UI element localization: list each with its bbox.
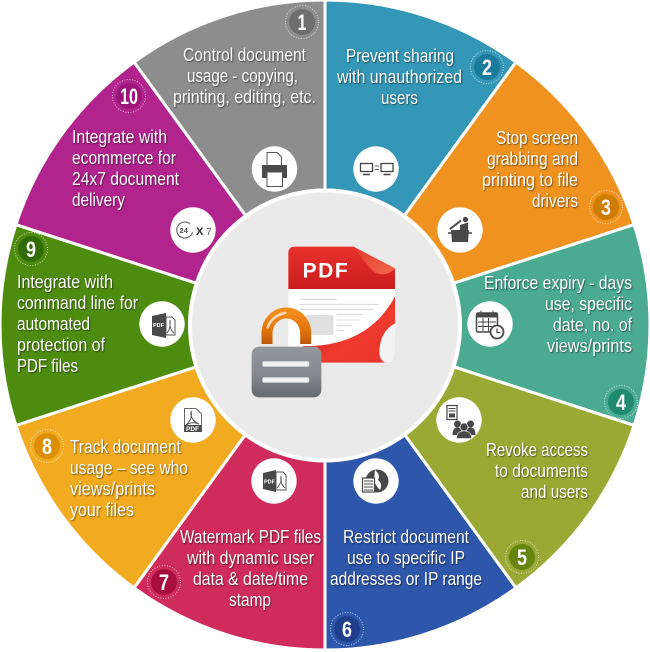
badge: number 5: 5 bbox=[517, 545, 527, 570]
text: enforce expiry: date, no. of bbox=[553, 315, 633, 335]
panel: 3 stop screen grabbing bbox=[404, 62, 634, 283]
text: restrict document use: Restrict document bbox=[343, 527, 469, 547]
heading: PDF label: PDF bbox=[303, 259, 348, 282]
text: stop screen grabbing: printing to file bbox=[482, 170, 578, 190]
badge: number 10 bbox=[112, 80, 146, 112]
text: control document usage: printing, editing, etc. bbox=[173, 87, 316, 107]
text: stop screen grabbing bbox=[482, 128, 578, 211]
text: track document usage: your files bbox=[70, 500, 134, 520]
badge: number 8: 8 bbox=[42, 434, 52, 459]
text: watermark PDF files bbox=[180, 527, 321, 610]
panel: 4 enforce expiry bbox=[453, 225, 650, 425]
badge: number 2: 2 bbox=[482, 55, 492, 80]
text: prevent sharing: users bbox=[381, 88, 418, 108]
text: integrate with ecommerce: ecommerce for bbox=[72, 148, 176, 168]
badge: number 5 bbox=[506, 540, 538, 574]
text: integrate with command line: Integrate with bbox=[17, 272, 113, 292]
text: prevent sharing: Prevent sharing bbox=[346, 46, 454, 66]
icon: 24x7 bbox=[170, 207, 216, 253]
badge: number 6 bbox=[330, 612, 364, 646]
text: enforce expiry: Enforce expiry - days bbox=[484, 273, 632, 293]
text: stop screen grabbing: Stop screen bbox=[496, 128, 578, 148]
text: enforce expiry bbox=[484, 273, 633, 356]
badge: number 6: 6 bbox=[342, 617, 352, 642]
badge: number 3 bbox=[590, 190, 622, 224]
text: enforce expiry: use, specific bbox=[545, 294, 632, 314]
text: prevent sharing: with unauthorized bbox=[336, 67, 462, 87]
text: track document usage: views/prints bbox=[70, 479, 155, 499]
badge: number 2 bbox=[470, 50, 504, 84]
icon: 24x7: 24 bbox=[180, 226, 189, 235]
panel: 5 revoke access bbox=[404, 367, 634, 588]
badge: number 1: 1 bbox=[298, 10, 306, 35]
icon: PDF watermark pages bbox=[251, 458, 297, 504]
text: track document usage: usage – see who bbox=[70, 458, 188, 478]
badge: number 8 bbox=[30, 430, 64, 462]
text: revoke access: to documents bbox=[495, 461, 588, 481]
panel: 6 restrict document use bbox=[325, 434, 516, 650]
text: stop screen grabbing: drivers bbox=[532, 191, 578, 211]
text: integrate with ecommerce bbox=[72, 127, 179, 210]
text: restrict document use: addresses or IP range bbox=[330, 569, 482, 589]
text: integrate with ecommerce: Integrate with bbox=[72, 127, 167, 147]
icon: 24x7: X bbox=[196, 226, 204, 238]
icon: calendar and clock bbox=[467, 301, 513, 347]
badge: number 10: 10 bbox=[120, 84, 138, 109]
text: enforce expiry: views/prints bbox=[547, 336, 632, 356]
badge: number 3: 3 bbox=[601, 195, 611, 220]
text: watermark PDF files: with dynamic user bbox=[186, 548, 314, 568]
badge: number 7 bbox=[148, 566, 180, 598]
icon: PDF pages: PDF bbox=[153, 323, 165, 329]
text: track document usage bbox=[70, 437, 188, 520]
icon: PDF file bbox=[170, 397, 216, 443]
text: integrate with ecommerce: 24x7 document bbox=[72, 169, 179, 189]
text: integrate with command line: protection of bbox=[17, 335, 106, 355]
text: watermark PDF files: data & date/time bbox=[193, 569, 308, 589]
text: watermark PDF files: stamp bbox=[229, 590, 271, 610]
center disc with PDF lock bbox=[188, 188, 462, 462]
text: stop screen grabbing: grabbing and bbox=[487, 149, 578, 169]
text: integrate with command line: automated bbox=[17, 314, 90, 334]
text: restrict document use: use to specific IP bbox=[347, 548, 465, 568]
text: control document usage bbox=[173, 45, 316, 107]
text: integrate with command line bbox=[17, 272, 138, 376]
text: track document usage: Track document bbox=[70, 437, 181, 457]
text: control document usage: usage - copying, bbox=[187, 66, 298, 86]
icon: screen grab box bbox=[437, 207, 483, 253]
text: revoke access: and users bbox=[521, 482, 588, 502]
text: restrict document use bbox=[330, 527, 482, 589]
badge: number 4: 4 bbox=[616, 390, 627, 415]
panel: 7 watermark PDF files bbox=[134, 434, 325, 650]
text: watermark PDF files: Watermark PDF files bbox=[180, 527, 321, 547]
icon: printer bbox=[252, 146, 297, 192]
text: integrate with command line: PDF files bbox=[17, 356, 78, 376]
icon: PDF watermark pages: PDF bbox=[264, 480, 276, 486]
panel: 8 track document usage bbox=[16, 367, 246, 588]
icon: 24x7: 7 bbox=[206, 227, 212, 238]
text: integrate with command line: command line for bbox=[17, 293, 138, 313]
panel: 1 control document usage bbox=[134, 0, 325, 216]
icon: PDF document bbox=[288, 247, 395, 363]
badge: number 1 bbox=[286, 6, 318, 38]
badge: number 7: 7 bbox=[159, 570, 169, 595]
badge: number 9: 9 bbox=[26, 237, 36, 262]
icon: two linked monitors bbox=[353, 146, 399, 192]
panel: 2 prevent sharing bbox=[325, 0, 516, 216]
text: integrate with ecommerce: delivery bbox=[72, 190, 125, 210]
icon: PDF pages bbox=[139, 301, 185, 347]
panel: 10 integrate with ecommerce bbox=[16, 62, 246, 283]
icon: PDF file: PDF bbox=[186, 426, 199, 433]
text: revoke access: Revoke access bbox=[486, 440, 588, 460]
icon: padlock bbox=[252, 313, 321, 397]
icon: document and users bbox=[436, 397, 482, 443]
text: prevent sharing bbox=[336, 46, 462, 108]
badge: number 4 bbox=[604, 386, 638, 418]
badge: number 9 bbox=[14, 232, 48, 266]
text: control document usage: Control document bbox=[183, 45, 306, 65]
icon: globe and document bbox=[353, 458, 399, 504]
panel: 9 integrate with command line bbox=[0, 225, 197, 425]
text: revoke access bbox=[486, 440, 588, 502]
